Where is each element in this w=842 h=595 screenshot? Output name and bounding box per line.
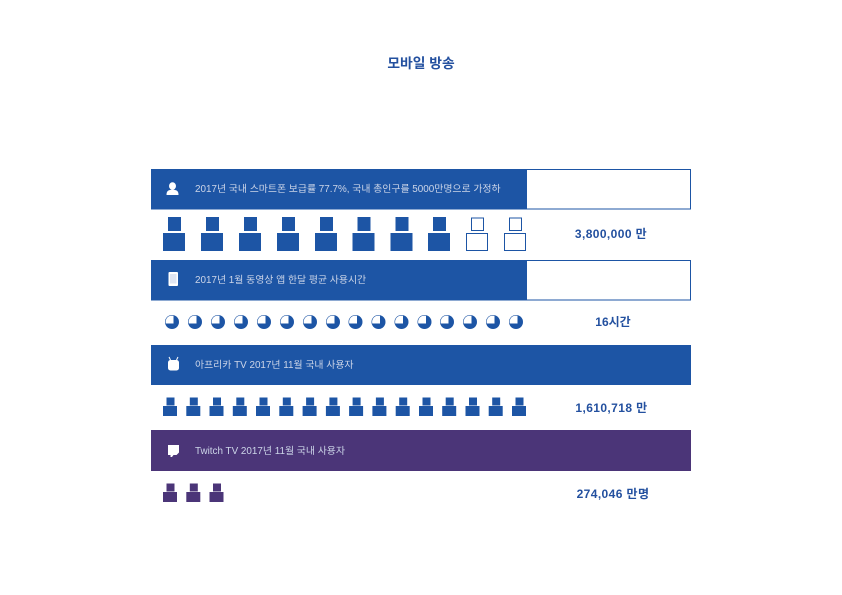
pictogram: AfreecaTV users [163, 398, 526, 416]
icon: phone [168, 272, 178, 286]
smartphone header text: 2017년 국내 스마트폰 보급률 77.7%, 국내 총인구를 5000만명으로 가정하 [195, 182, 501, 195]
panel: smartphone header bar [151, 169, 690, 209]
icon: twitch speech bubble [168, 445, 179, 457]
pictogram: Twitch users [163, 484, 224, 502]
AfreecaTV header text: 아프리카 TV 2017년 11월 국내 사용자 [195, 359, 354, 371]
video app header text: 2017년 1월 동영상 앱 한달 평균 사용시간 [195, 274, 366, 286]
value: 16 hours: 16시간 [595, 315, 631, 329]
icon: person [166, 182, 178, 195]
value: 274,046: 274,046 만명 [577, 487, 649, 501]
panel: video app header bar [151, 260, 690, 300]
panel: AfreecaTV header bar [151, 345, 691, 385]
value: 1,610,718: 1,610,718 만 [575, 401, 648, 415]
panel: Twitch header bar [151, 430, 691, 471]
pictogram: hours pies [165, 315, 523, 329]
pictogram: smartphone users [163, 217, 526, 251]
title: 모바일 방송 [387, 56, 455, 71]
value: 3,800,000: 3,800,000 만 [575, 227, 647, 241]
icon: tv [168, 357, 179, 370]
Twitch header text: Twitch TV 2017년 11월 국내 사용자 [195, 445, 345, 457]
